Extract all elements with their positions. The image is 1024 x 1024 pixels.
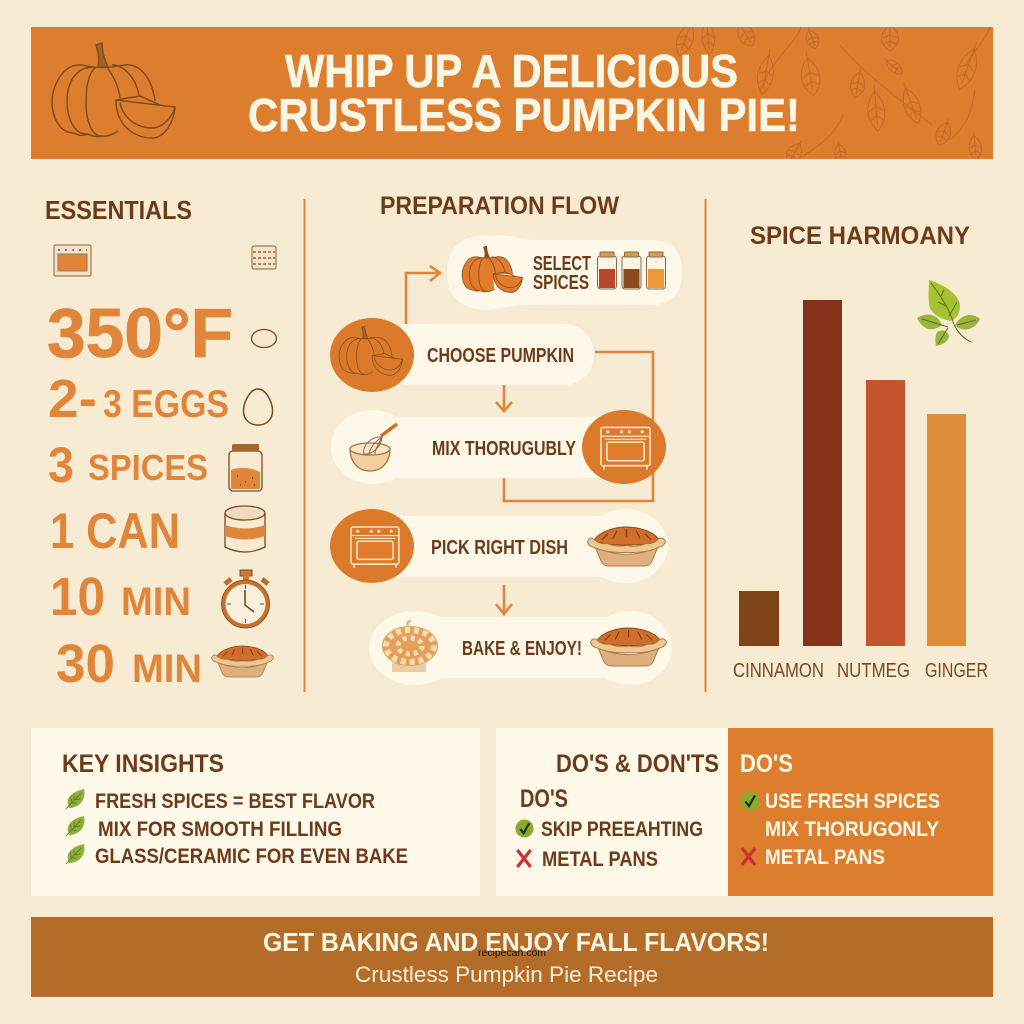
divider lines: [304, 199, 706, 692]
stat: 30 min: [56, 634, 202, 694]
icon: pie: [212, 646, 274, 677]
do: use fresh spices: USE FRESH SPICES: [765, 790, 940, 813]
step: select spices: SPICES: [533, 272, 589, 294]
insight: smooth filling: MIX FOR SMOOTH FILLING: [98, 818, 342, 841]
stat: 10 min: MIN: [121, 580, 191, 624]
key insights heading: KEY INSIGHTS: [62, 750, 224, 778]
header banner: [31, 27, 993, 159]
title: [248, 45, 800, 141]
title: WHIP UP A DELICIOUS: [285, 45, 738, 97]
orange heading: DO'S: [740, 750, 793, 778]
icon: egg oval: [252, 330, 276, 348]
stat: 30 min: MIN: [132, 647, 202, 691]
icon: pie: [588, 527, 666, 566]
stat: 350F: 350°F: [47, 294, 233, 372]
do: mix thoroughly: MIX THORUGONLY: [765, 818, 939, 841]
panel: preparation flow: [330, 192, 682, 685]
icon: stopwatch: [222, 570, 270, 628]
icon: whisk and bowl: [350, 424, 397, 471]
step: mix thoroughly: MIX THORUGUBLY: [432, 438, 577, 460]
bar labels: GINGER: [925, 660, 988, 682]
arrow: down to bake: [496, 585, 512, 614]
icon: oven: [351, 527, 399, 568]
stat: eggs: 2-: [48, 369, 97, 429]
stat: spices: [48, 437, 208, 493]
arrow: to select spices: [406, 266, 440, 324]
stat: 10 min: 10: [50, 567, 105, 627]
stat: eggs: [48, 369, 229, 429]
panel: spice harmony chart: [733, 222, 988, 682]
stat: spices: SPICES: [88, 447, 208, 488]
panel: dos orange: [728, 728, 993, 896]
insight: fresh spices: FRESH SPICES = BEST FLAVOR: [95, 790, 375, 813]
stat: 10 min: [50, 567, 191, 627]
icon: spice jar: [229, 444, 262, 491]
bar labels: [733, 660, 988, 682]
step: select spices: SELECT: [533, 253, 591, 275]
step: pick right dish: [330, 509, 668, 583]
title: CRUSTLESS PUMPKIN PIE!: [248, 89, 800, 141]
step: bake and enjoy: [369, 611, 672, 685]
icon: lattice pumpkin pie: [382, 621, 438, 672]
step: pick right dish: PICK RIGHT DISH: [431, 537, 568, 559]
dos and donts heading: DO'S & DON'TS: [556, 750, 719, 778]
stat: can: 1 CAN: [50, 503, 180, 559]
footer subtitle: Crustless Pumpkin Pie Recipe: [355, 962, 658, 987]
stat: eggs: 3 EGGS: [103, 383, 229, 426]
stat: 30 min: 30: [56, 634, 115, 694]
arrow: down to mix: [496, 385, 512, 411]
icon: small spice can: [252, 246, 276, 269]
step: choose pumpkin: [330, 318, 594, 392]
icon: oven: [601, 427, 650, 470]
bar labels: NUTMEG: [837, 660, 910, 682]
step: choose pumpkin: CHOOSE PUMPKIN: [427, 345, 574, 367]
connector: pumpkin to oven loop: [504, 352, 653, 501]
essentials heading: ESSENTIALS: [45, 195, 192, 225]
icon: pie: [590, 628, 666, 666]
preparation heading: PREPARATION FLOW: [380, 192, 619, 220]
panel: essentials: [45, 195, 276, 694]
dos subheading: DO'S: [520, 785, 568, 813]
insight: glass ceramic: GLASS/CERAMIC FOR EVEN BAKE: [95, 845, 408, 868]
icon: spice jars: [598, 252, 666, 289]
panel: key insights: [31, 728, 480, 896]
bar labels: CINNAMON: [733, 660, 824, 682]
icon: pumpkin: [462, 246, 522, 293]
do: skip preheating: SKIP PREEAHTING: [541, 818, 703, 841]
step: select spices: [447, 235, 682, 310]
step: bake and enjoy: BAKE & ENJOY!: [462, 638, 582, 660]
icon: pumpkin outline: [339, 326, 402, 375]
footer banner: [31, 917, 993, 997]
dont: metal pans: METAL PANS: [542, 848, 658, 871]
icon: can: [225, 506, 265, 552]
footer headline: GET BAKING AND ENJOY FALL FLAVORS!: [263, 927, 769, 957]
icon: oven: [54, 245, 91, 276]
bar chart: [739, 300, 966, 646]
icon: green leaf sprig: [917, 280, 980, 346]
step: mix thoroughly: [331, 410, 666, 484]
stat: spices: 3: [48, 437, 74, 493]
header pumpkin icon: [52, 43, 175, 138]
header leaf pattern: [676, 27, 990, 159]
watermark: recipecan.com: [478, 948, 546, 959]
chart heading: SPICE HARMOANY: [750, 222, 970, 250]
panel: dos and donts: [496, 728, 728, 896]
dont: metal pans: METAL PANS: [765, 846, 885, 869]
icon: egg: [244, 389, 272, 425]
